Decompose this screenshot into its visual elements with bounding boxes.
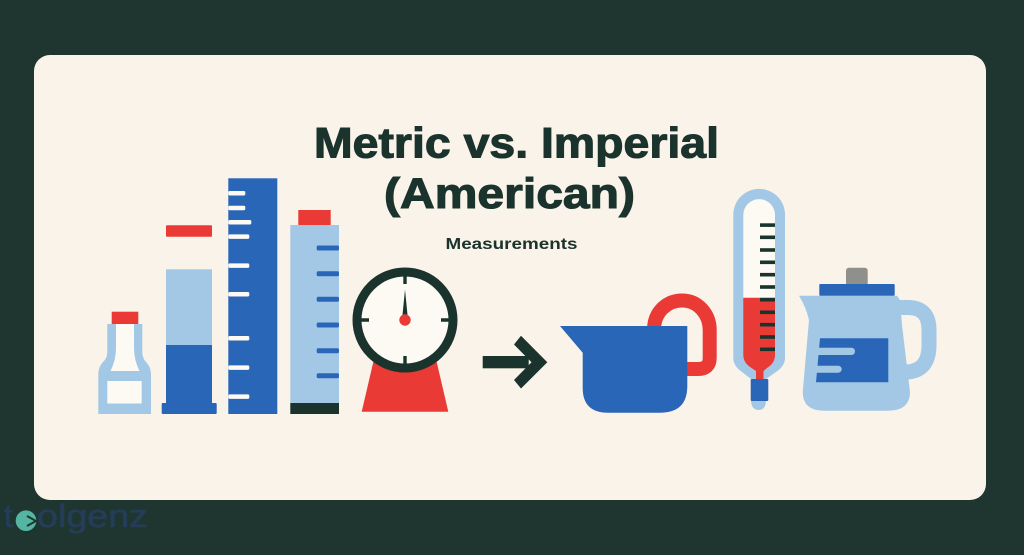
watermark logo xyxy=(4,498,148,534)
title xyxy=(314,120,719,218)
watermark logo: olgenz xyxy=(37,498,148,534)
icon: measuring cup xyxy=(560,300,710,413)
icon: ruler xyxy=(228,178,277,414)
icon: measuring cylinder xyxy=(162,225,217,414)
icon: bottle xyxy=(98,312,151,414)
icon: jug xyxy=(799,268,929,411)
icon: kitchen scale xyxy=(357,272,453,412)
watermark logo: t xyxy=(4,498,13,534)
panel: cream card xyxy=(34,55,986,500)
arrow xyxy=(483,336,547,388)
title: Metric vs. Imperial xyxy=(314,120,719,168)
subtitle: Measurements xyxy=(446,236,578,253)
icon: graduated column xyxy=(290,210,339,414)
icon: thermometer xyxy=(733,189,785,410)
title: (American) xyxy=(384,170,635,218)
